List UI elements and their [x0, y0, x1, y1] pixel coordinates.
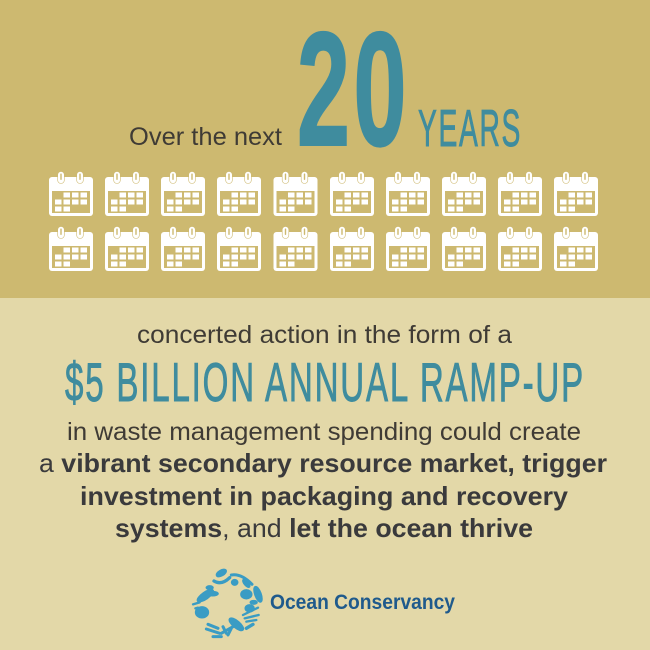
panel: bottom background [0, 298, 650, 650]
heading: over the next: Over the next [129, 123, 282, 151]
text: systems and let the ocean thrive: systems, and let the ocean thrive [115, 513, 533, 543]
text: concerted action: concerted action in the form of a [137, 321, 512, 349]
heading: big number 20: 20 [297, 0, 410, 180]
calendar grid: 20 years [49, 172, 598, 271]
logo: wordmark: Ocean Conservancy [270, 591, 455, 614]
heading: years: YEARS [418, 100, 522, 158]
text: investment in packaging: investment in packaging and recovery [80, 481, 569, 511]
text: vibrant secondary resource market: a vibrant secondary resource market, trigger [39, 448, 607, 478]
panel: top background [0, 0, 650, 298]
logo: ocean conservancy ring [193, 568, 264, 637]
text: in waste management: in waste management spending could create [67, 418, 581, 446]
